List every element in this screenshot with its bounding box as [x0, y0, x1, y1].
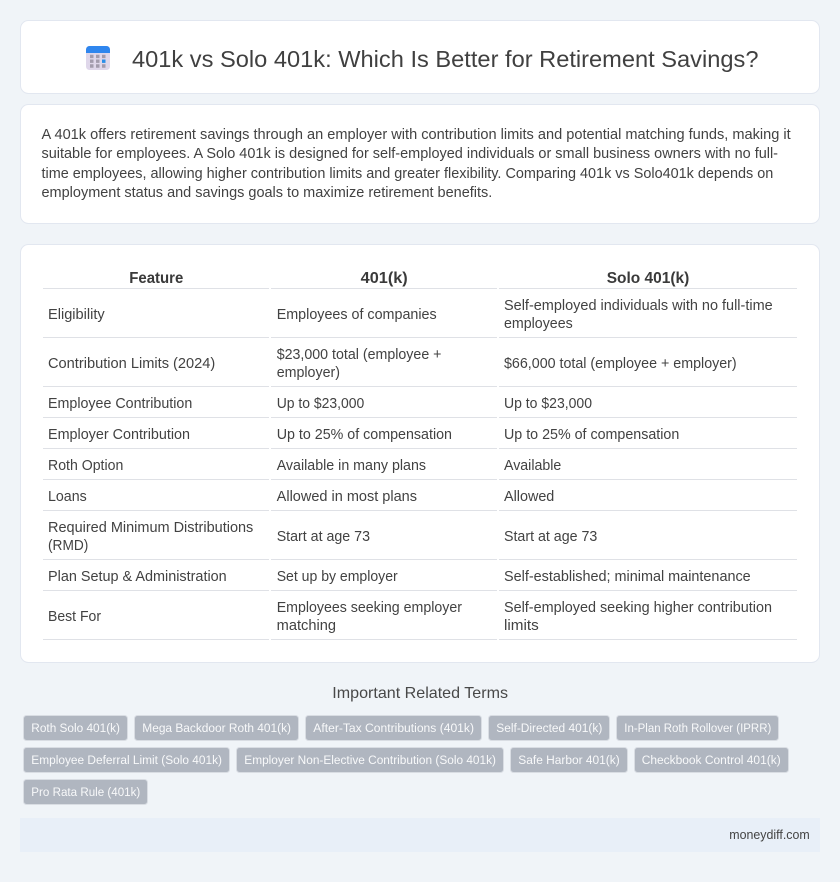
row: contribution limits: Contribution Limits (2024): [48, 356, 215, 372]
row: required minimum distributions: (RMD): [48, 538, 88, 554]
row: employee contribution: [48, 396, 592, 412]
row: employer contribution: Up to 25% of compensation: [277, 427, 452, 443]
intro text: [42, 127, 791, 201]
row: employee contribution: Up to $23,000: [504, 396, 592, 412]
row: required minimum distributions: Required Minimum Distributions: [48, 520, 253, 536]
tag: Employer Non-Elective Contribution (Solo 401k): Employer Non-Elective Contribution (Solo 401k): [244, 753, 496, 767]
row: eligibility: Eligibility: [48, 307, 106, 323]
tag: Self-Directed 401(k): [488, 716, 610, 740]
panel: introduction: [20, 104, 820, 224]
row: loans: [48, 489, 554, 505]
tag: Checkbook Control 401(k): Checkbook Control 401(k): [642, 753, 781, 767]
intro text: A 401k offers retirement savings through an employer with contribution limits and potential matching funds, making it: [42, 127, 791, 143]
icon: calendar: [86, 46, 110, 70]
row: eligibility: Employees of companies: [277, 307, 437, 323]
row: best for: Best For: [48, 609, 101, 625]
footer: [20, 818, 820, 852]
row: roth option: Available in many plans: [277, 458, 426, 474]
row: plan setup and administration: Plan Setup & Administration: [48, 569, 227, 585]
row: required minimum distributions: [48, 520, 597, 554]
tag: Safe Harbor 401(k): [510, 748, 628, 772]
tag: Mega Backdoor Roth 401(k): Mega Backdoor Roth 401(k): [142, 721, 291, 735]
row: employer contribution: Up to 25% of compensation: [504, 427, 679, 443]
row: plan setup and administration: Set up by employer: [277, 569, 398, 585]
row: roth option: Roth Option: [48, 458, 123, 474]
row: best for: [48, 600, 772, 634]
row: contribution limits: [48, 347, 737, 381]
row: loans: Allowed in most plans: [277, 489, 417, 505]
footer site name: moneydiff.com: [729, 827, 810, 842]
tag: Self-Directed 401(k): Self-Directed 401(k): [496, 721, 602, 735]
row: employer contribution: [48, 427, 679, 443]
row: roth option: [48, 458, 561, 474]
title: 401k vs Solo 401k: Which Is Better for Retirement Savings?: [132, 46, 758, 72]
row: plan setup and administration: [48, 569, 751, 585]
tag: Pro Rata Rule (401k): [24, 780, 148, 804]
row: plan setup and administration: Self-established; minimal maintenance: [504, 569, 751, 585]
row: required minimum distributions: Start at age 73: [504, 529, 597, 545]
tag: In-Plan Roth Rollover (IPRR): [616, 716, 778, 740]
row: employer contribution: Employer Contribution: [48, 427, 190, 443]
table header row: [129, 270, 689, 287]
tag: Mega Backdoor Roth 401(k): [134, 716, 298, 740]
table header row: 401(k): [361, 270, 408, 287]
intro text: suitable for employees. A Solo 401k is designed for self-employed individuals or small business owners with no full-: [42, 146, 778, 162]
row: best for: Employees seeking employer: [277, 600, 462, 616]
tag: Roth Solo 401(k): [24, 716, 128, 740]
tag: Employee Deferral Limit (Solo 401k): Employee Deferral Limit (Solo 401k): [31, 753, 222, 767]
row: required minimum distributions: Start at age 73: [277, 529, 370, 545]
related terms tags: [24, 716, 788, 804]
row: loans: Loans: [48, 489, 87, 505]
intro text: employment status and savings goals to maximize retirement benefits.: [42, 185, 492, 201]
tag: Employee Deferral Limit (Solo 401k): [24, 748, 230, 772]
row: contribution limits: employer): [277, 365, 340, 381]
row: best for: Self-employed seeking higher contribution: [504, 600, 772, 616]
row: contribution limits: $23,000 total (employee +: [277, 347, 442, 363]
header panel: [20, 20, 820, 94]
tag: Employer Non-Elective Contribution (Solo 401k): [236, 748, 504, 772]
tag: After-Tax Contributions (401k): [306, 716, 482, 740]
intro text: time employees, allowing higher contribution limits and greater flexibility. Comparing 401k vs Solo401k depends on: [42, 166, 773, 182]
tag: In-Plan Roth Rollover (IPRR): In-Plan Roth Rollover (IPRR): [624, 721, 771, 735]
tag: Safe Harbor 401(k): Safe Harbor 401(k): [518, 753, 620, 767]
row: roth option: Available: [504, 458, 561, 474]
table header row: Solo 401(k): [607, 270, 689, 287]
tag: Pro Rata Rule (401k): Pro Rata Rule (401k): [31, 785, 140, 799]
row: eligibility: [48, 298, 773, 332]
row: employee contribution: Employee Contribution: [48, 396, 192, 412]
row: loans: Allowed: [504, 489, 554, 505]
section heading: related terms: Important Related Terms: [332, 685, 508, 702]
panel: comparison table: [20, 244, 820, 662]
row: contribution limits: $66,000 total (employee + employer): [504, 356, 737, 372]
table header row: Feature: [129, 270, 183, 287]
tag: Roth Solo 401(k): Roth Solo 401(k): [31, 721, 120, 735]
tag: After-Tax Contributions (401k): After-Tax Contributions (401k): [313, 721, 474, 735]
row: eligibility: employees: [504, 316, 573, 332]
row: best for: matching: [277, 618, 336, 634]
row: best for: limits: [504, 618, 539, 634]
row: eligibility: Self-employed individuals with no full-time: [504, 298, 773, 314]
tag: Checkbook Control 401(k): [634, 748, 788, 772]
row: employee contribution: Up to $23,000: [277, 396, 364, 412]
